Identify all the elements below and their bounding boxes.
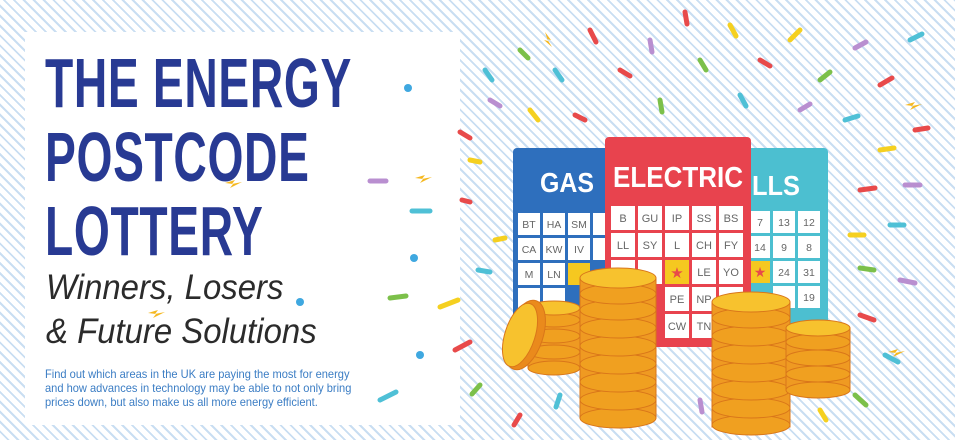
card: bills: 19 [803, 292, 815, 304]
card: electric: YO [723, 267, 739, 279]
card: gas: HA [547, 219, 561, 231]
card: electric: L [674, 240, 680, 252]
card: electric: ELECTRIC [613, 162, 743, 194]
card: bills: 12 [803, 217, 815, 229]
far right stack [786, 320, 850, 398]
confetti [370, 12, 928, 425]
card: electric: TN [697, 321, 711, 333]
card: electric: SS [697, 213, 711, 225]
title: LOTTERY [45, 192, 264, 270]
card: bills: 24 [778, 267, 790, 279]
card: bills [740, 148, 828, 333]
icon: swirls [296, 84, 424, 359]
right tall stack [712, 292, 790, 435]
card: gas [513, 148, 613, 338]
card: bills: LLS [752, 170, 800, 201]
text block: intro: prices down, but also make us all more energy efficient. [45, 395, 318, 409]
card: electric: LL [617, 240, 629, 252]
card: bills: 31 [803, 267, 815, 279]
subtitle [46, 268, 317, 351]
card: electric: BS [724, 213, 738, 225]
card: bills: 8 [806, 242, 812, 254]
center tall stack [580, 268, 656, 428]
card: electric: GU [642, 213, 658, 225]
icon: lightning bolts [148, 32, 922, 357]
subtitle: & Future Solutions [46, 312, 317, 351]
text block: intro [45, 367, 351, 409]
text block: intro: Find out which areas in the UK are paying the most for energy [45, 367, 350, 381]
card: electric: LE [697, 267, 711, 279]
card: electric: B [619, 213, 627, 225]
card: electric: NP [696, 294, 712, 306]
subtitle: Winners, Losers [46, 268, 283, 307]
card: gas: SM [571, 219, 587, 231]
card: gas: KW [546, 244, 563, 256]
card: electric: IP [672, 213, 682, 225]
left small stack [528, 301, 580, 375]
text block: intro: and how advances in technology may be able to not only bring [45, 381, 351, 395]
card: electric: CW [668, 321, 687, 333]
card: gas: M [525, 269, 533, 281]
card: bills: 14 [754, 242, 766, 254]
card: gas: BT [522, 219, 536, 231]
card: bills: 13 [778, 217, 790, 229]
title: POSTCODE [45, 118, 310, 196]
title: THE ENERGY [45, 44, 352, 122]
card: gas: GAS [540, 167, 594, 198]
card: gas: CA [522, 244, 536, 256]
card: bills: ★ [754, 264, 766, 280]
card: electric: PE [670, 294, 684, 306]
title [45, 44, 352, 270]
card: gas: IV [574, 244, 584, 256]
panel: title card [25, 32, 460, 425]
card: gas: LN [547, 269, 561, 281]
card: electric: ★ [670, 265, 684, 282]
coins [496, 268, 850, 435]
card: electric: FY [724, 240, 739, 252]
card: electric: SY [643, 240, 658, 252]
tilted coin [496, 295, 553, 375]
card: bills: 9 [781, 242, 787, 254]
card: electric: CH [696, 240, 712, 252]
card: electric [605, 137, 751, 347]
card: bills: 7 [757, 217, 763, 229]
